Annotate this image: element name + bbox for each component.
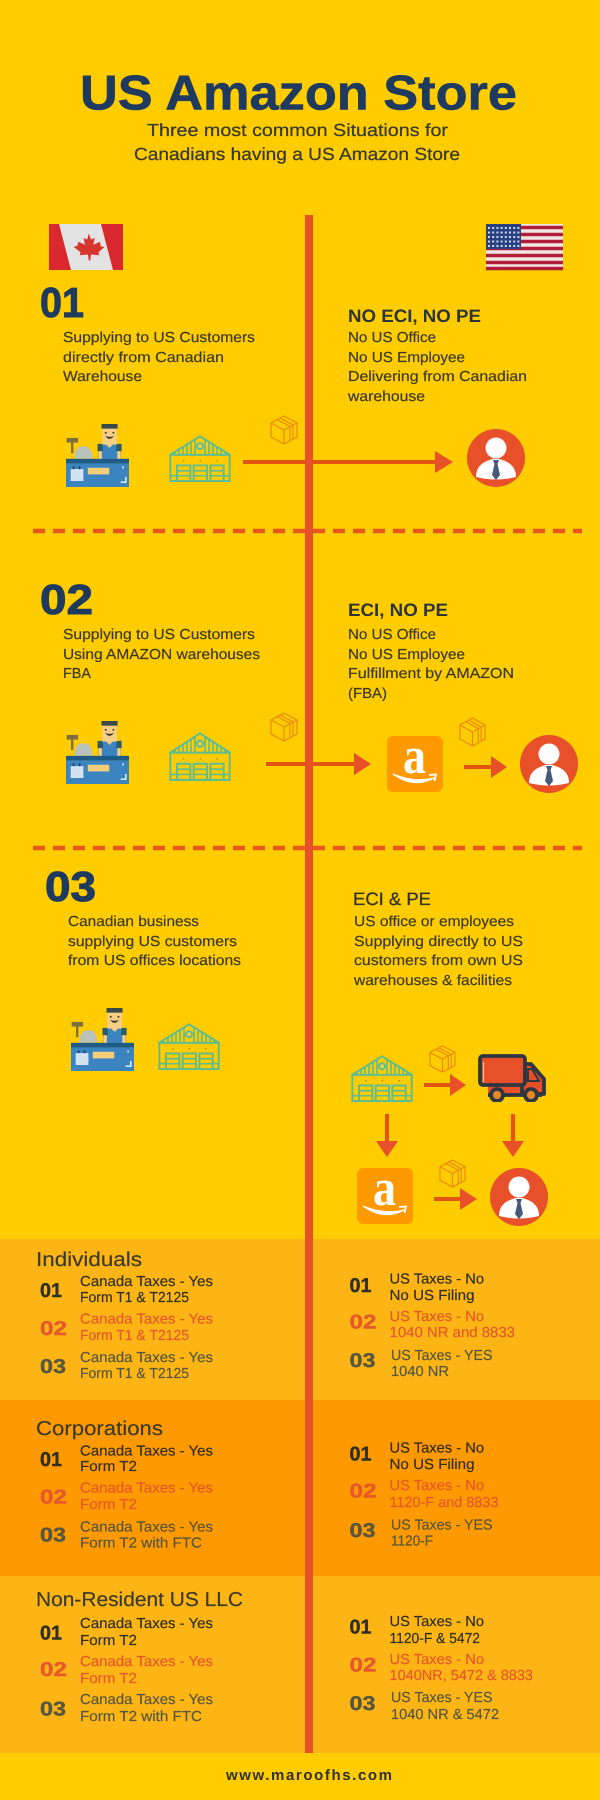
- arrow 02 to customer: [464, 756, 507, 778]
- arrow 02 to amazon: [266, 753, 371, 775]
- icon: truck: [480, 1056, 544, 1101]
- row 01: No US Filing: [390, 1457, 474, 1473]
- row 02: [40, 1654, 213, 1687]
- panel: corporations band: [0, 1400, 600, 1576]
- row 03: Canada Taxes - Yes: [80, 1692, 213, 1708]
- row 03: Canada Taxes - Yes: [80, 1350, 213, 1366]
- icon: warehouse 03b: [352, 1056, 412, 1101]
- row 01: Canada Taxes - Yes: [80, 1444, 213, 1460]
- row 01: 1120-F & 5472: [390, 1631, 480, 1647]
- panel: individuals right: [350, 1272, 515, 1380]
- description 02: Using AMAZON warehouses: [63, 647, 260, 663]
- row 03: 1040 NR: [391, 1364, 449, 1380]
- description 02: Supplying to US Customers: [63, 627, 255, 643]
- description 02: FBA: [63, 666, 91, 682]
- conditions 03: US office or employees: [354, 914, 514, 930]
- row 02: Canada Taxes - Yes: [80, 1480, 213, 1496]
- divider: [33, 529, 582, 533]
- arrow 03 to truck: [424, 1074, 466, 1096]
- panel: non-resident US LLC band: [0, 1576, 600, 1753]
- arrow 03 amazon to customer: [434, 1188, 477, 1210]
- divider: [33, 846, 582, 850]
- row 02: 02: [350, 1480, 376, 1502]
- row 02: 1040 NR and 8833: [390, 1325, 515, 1341]
- section 03 left: [45, 863, 241, 969]
- row 03: 03: [40, 1698, 66, 1720]
- conditions 02: Fulfillment by AMAZON: [348, 666, 514, 682]
- section 02 left: [40, 576, 260, 682]
- description 01: [63, 330, 255, 385]
- icon: warehouse 01: [170, 436, 230, 481]
- description 01: Warehouse: [63, 369, 142, 385]
- row 02: 02: [350, 1654, 376, 1676]
- description 03: Canadian business: [68, 914, 199, 930]
- row 01: US Taxes - No: [390, 1272, 484, 1288]
- row 03: 1120-F: [391, 1534, 433, 1550]
- conditions 03: Supplying directly to US: [354, 934, 523, 950]
- row 02: Canada Taxes - Yes: [80, 1312, 213, 1328]
- row 01: [40, 1444, 213, 1475]
- icon: customer 02: [520, 735, 578, 793]
- central vertical line: [305, 215, 313, 1753]
- description 01: directly from Canadian: [63, 350, 224, 366]
- heading individuals: Individuals: [36, 1249, 142, 1271]
- row 02: 1040NR, 5472 & 8833: [390, 1668, 533, 1684]
- row 03: US Taxes - YES: [391, 1348, 492, 1364]
- panel: non-resident US LLC right: [350, 1614, 533, 1723]
- heading ECI, NO PE: ECI, NO PE: [348, 600, 448, 620]
- conditions 02: (FBA): [348, 686, 387, 702]
- row 01: [350, 1440, 484, 1473]
- icon: box 03b: [440, 1160, 465, 1187]
- icon: cashier 03: [71, 1008, 134, 1071]
- row 03: Form T2 with FTC: [80, 1709, 202, 1725]
- row 03: US Taxes - YES: [391, 1690, 492, 1706]
- row 03: Form T2 with FTC: [80, 1536, 202, 1552]
- row 01: [350, 1272, 484, 1304]
- panel: individuals left: [36, 1249, 213, 1382]
- row 03: 03: [40, 1356, 66, 1378]
- number 01: 01: [40, 279, 84, 326]
- row 02: [350, 1652, 533, 1684]
- row 03: Canada Taxes - Yes: [80, 1520, 213, 1536]
- row 02: Form T1 & T2125: [80, 1328, 189, 1344]
- description 03: from US offices locations: [68, 953, 241, 969]
- conditions 01: Delivering from Canadian: [348, 369, 527, 385]
- icon: amazon 02: [387, 728, 443, 792]
- icon: warehouse 03: [159, 1024, 219, 1069]
- icon: cashier 02: [66, 721, 129, 784]
- number 03: 03: [45, 863, 96, 910]
- row 01: 01: [350, 1275, 372, 1297]
- conditions 02: No US Office: [348, 627, 436, 643]
- icon: box 02b: [460, 718, 485, 746]
- row 02: [40, 1480, 213, 1513]
- description 03: supplying US customers: [68, 934, 237, 950]
- conditions 03: warehouses & facilities: [353, 973, 512, 989]
- row 01: Form T1 & T2125: [80, 1290, 189, 1306]
- row 01: No US Filing: [390, 1288, 474, 1304]
- row 01: [40, 1274, 213, 1306]
- row 02: Form T2: [80, 1671, 137, 1687]
- row 01: Form T2: [80, 1633, 137, 1649]
- section 03 right: [353, 889, 523, 989]
- row 03: US Taxes - YES: [391, 1518, 492, 1534]
- conditions 03: [353, 914, 523, 989]
- row 02: [350, 1478, 498, 1511]
- row 03: 03: [40, 1524, 66, 1546]
- row 01: [40, 1616, 213, 1649]
- subtitle: [134, 120, 460, 164]
- icon: warehouse 02: [170, 733, 230, 780]
- row 02: US Taxes - No: [390, 1652, 484, 1668]
- panel: individuals band: [0, 1239, 600, 1400]
- conditions 03: customers from own US: [354, 953, 523, 969]
- row 01: 01: [40, 1280, 62, 1302]
- arrow 03 down to customer: [502, 1114, 524, 1157]
- icon: box 01: [271, 416, 297, 444]
- conditions 02: [348, 627, 514, 702]
- row 01: 01: [350, 1444, 372, 1466]
- description 03: [68, 914, 241, 969]
- row 02: US Taxes - No: [390, 1309, 484, 1325]
- row 03: [350, 1690, 499, 1723]
- conditions 01: No US Office: [348, 330, 436, 346]
- row 02: 02: [350, 1312, 376, 1334]
- row 03: 03: [350, 1350, 376, 1372]
- footer url: www.maroofhs.com: [225, 1767, 392, 1784]
- icon: Canadian flag: [49, 224, 123, 270]
- heading ECI & PE: ECI & PE: [353, 889, 431, 909]
- row 02: [40, 1312, 213, 1344]
- description 02: [63, 627, 260, 682]
- row 03: [350, 1348, 492, 1380]
- icon: customer 03: [490, 1168, 548, 1226]
- row 03: [40, 1350, 213, 1382]
- section 01 left: [40, 279, 255, 385]
- row 03: [350, 1518, 492, 1550]
- row 02: 02: [40, 1486, 67, 1508]
- row 01: Canada Taxes - Yes: [80, 1616, 213, 1632]
- heading non-resident US LLC: Non-Resident US LLC: [36, 1589, 243, 1611]
- row 03: 03: [350, 1520, 376, 1542]
- row 01: [350, 1614, 484, 1647]
- arrow 01: [243, 451, 453, 473]
- row 01: Form T2: [80, 1459, 137, 1475]
- row 01: 01: [350, 1616, 372, 1638]
- section 01 right: [347, 306, 527, 405]
- icon: cashier 01: [66, 424, 129, 487]
- icon: box 02: [271, 713, 297, 741]
- subtitle: Canadians having a US Amazon Store: [134, 144, 460, 164]
- conditions 01: [347, 330, 527, 405]
- panel: non-resident US LLC left: [36, 1589, 243, 1725]
- row 03: 03: [350, 1693, 376, 1715]
- conditions 01: No US Employee: [348, 350, 465, 366]
- row 02: US Taxes - No: [390, 1478, 484, 1494]
- row 01: US Taxes - No: [390, 1614, 484, 1630]
- icon: box 03: [430, 1046, 455, 1072]
- row 02: [350, 1309, 515, 1341]
- panel: corporations left: [36, 1418, 213, 1552]
- icon: US flag: [486, 224, 563, 270]
- row 01: Canada Taxes - Yes: [80, 1274, 213, 1290]
- description 01: Supplying to US Customers: [63, 330, 255, 346]
- arrow 03 down to amazon: [376, 1114, 398, 1157]
- icon: customer 01: [467, 429, 525, 487]
- title: US Amazon Store: [80, 66, 517, 120]
- conditions 01: warehouse: [347, 389, 425, 405]
- row 03: Form T1 & T2125: [80, 1366, 189, 1382]
- icon: amazon 03: [357, 1160, 413, 1224]
- conditions 02: No US Employee: [348, 647, 465, 663]
- row 02: Canada Taxes - Yes: [80, 1654, 213, 1670]
- heading corporations: Corporations: [36, 1418, 163, 1440]
- row 03: [40, 1520, 213, 1552]
- row 01: 01: [40, 1622, 62, 1644]
- row 02: Form T2: [80, 1497, 137, 1513]
- row 02: 1120-F and 8833: [390, 1495, 498, 1511]
- number 02: 02: [40, 576, 93, 623]
- heading NO ECI, NO PE: NO ECI, NO PE: [348, 306, 481, 326]
- row 03: [40, 1692, 213, 1725]
- subtitle: Three most common Situations for: [147, 120, 448, 140]
- section 02 right: [348, 600, 514, 702]
- row 03: 1040 NR & 5472: [391, 1707, 499, 1723]
- panel: corporations right: [350, 1440, 498, 1550]
- row 02: 02: [40, 1318, 67, 1340]
- row 01: US Taxes - No: [390, 1440, 484, 1456]
- row 01: 01: [40, 1449, 62, 1471]
- row 02: 02: [40, 1659, 67, 1681]
